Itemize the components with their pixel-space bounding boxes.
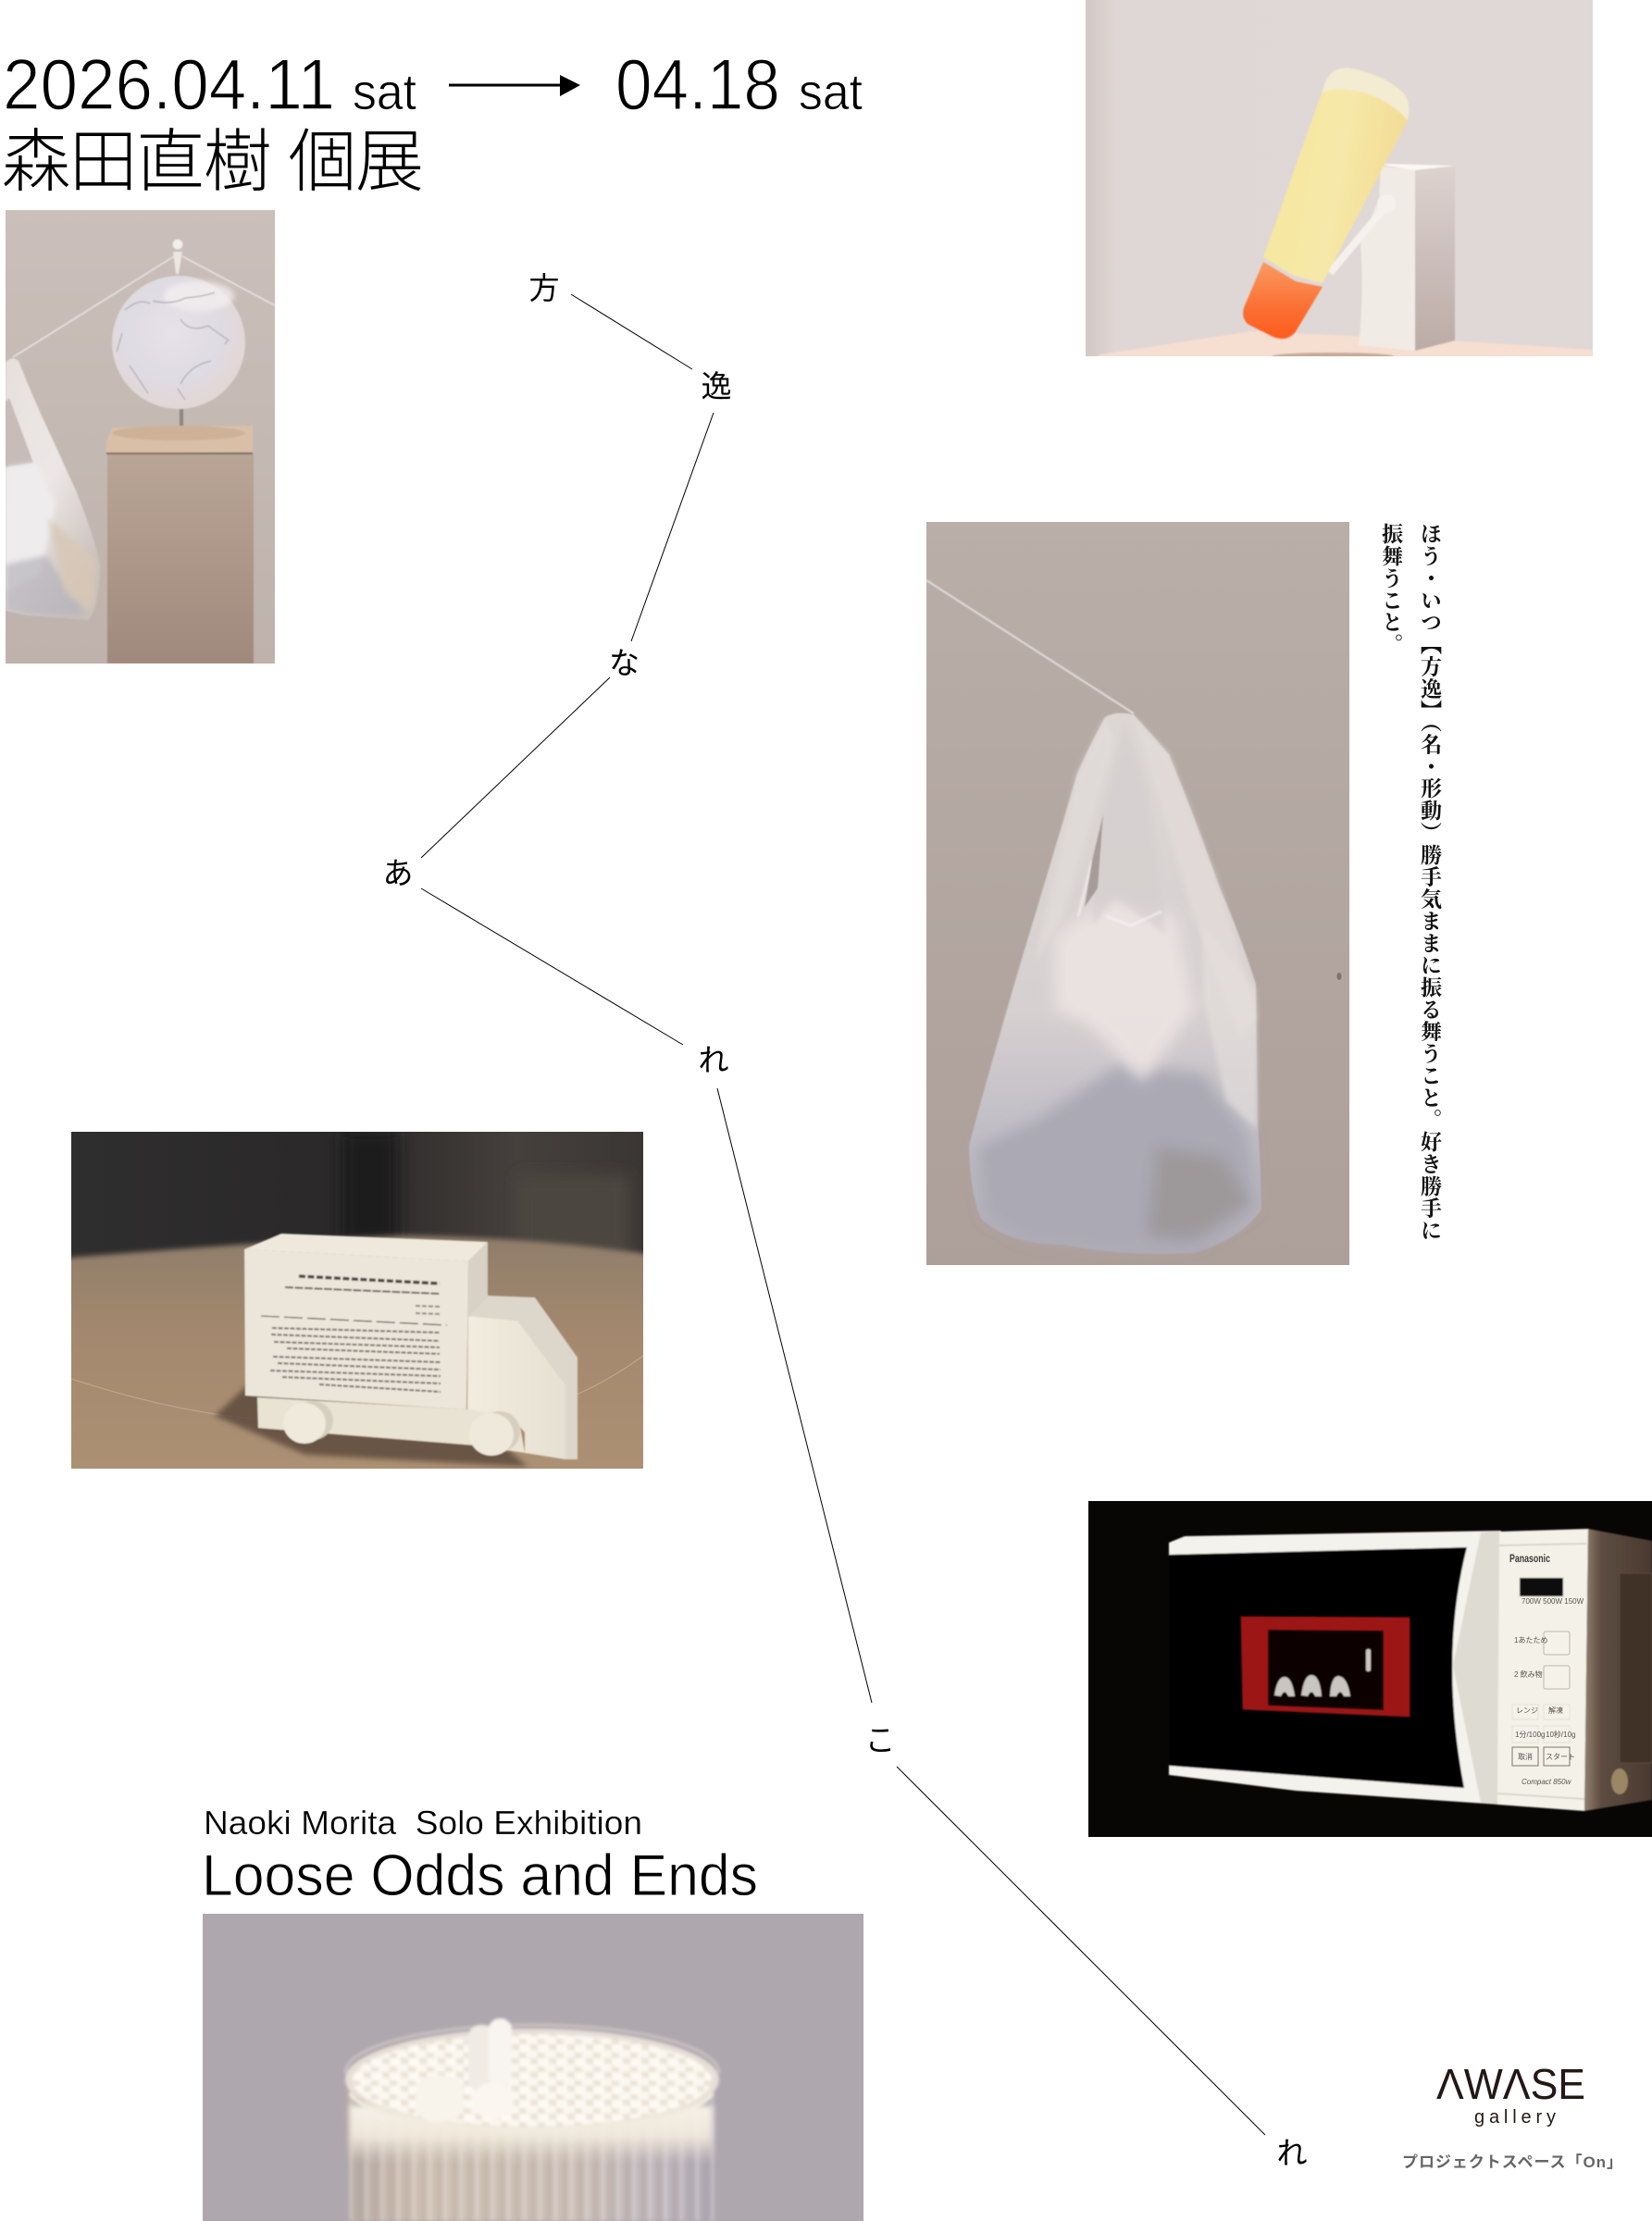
vertical guide path with hiragana: 方逸なあれこれ	[383, 271, 1307, 2170]
panel labels: 10秒/10g	[1546, 1730, 1575, 1739]
stand pin	[180, 409, 183, 433]
bottle body	[1263, 68, 1410, 283]
door window	[1169, 1547, 1467, 1788]
truck box	[244, 1234, 488, 1409]
string	[926, 580, 1134, 713]
bag body	[969, 713, 1261, 1254]
text block: dictionary definition in vertical type: ほう・いつ【方逸】（名・形動）勝手気ままに振る舞うこと。好き勝手に	[1418, 523, 1441, 1241]
arrow: date range	[449, 75, 580, 96]
logo: AWASE gallery	[1402, 2060, 1622, 2171]
pedestal body	[107, 454, 254, 664]
photo: cup of cotton swabs	[203, 1914, 863, 2221]
oven side	[1584, 1529, 1652, 1811]
connecting lines	[421, 294, 1265, 2135]
table surface	[71, 1232, 643, 1469]
subtitle: Naoki Morita Solo Exhibition: Naoki Morita Solo Exhibition	[204, 1804, 642, 1842]
rice ball icons	[1274, 1649, 1371, 1696]
panel labels: 2 飲み物	[1514, 1669, 1543, 1679]
truck chassis	[257, 1397, 525, 1453]
text block: definition second column: 振舞うこと。	[1379, 523, 1402, 655]
globe	[112, 276, 245, 409]
character れ: れ	[698, 1043, 729, 1077]
truck wheels	[283, 1401, 520, 1456]
panel labels: 解凍	[1548, 1706, 1563, 1715]
panel labels: 取消	[1518, 1752, 1533, 1761]
shadow under truck	[213, 1384, 528, 1469]
door shading	[1453, 1531, 1501, 1805]
title: artist name in Japanese: 森田直樹 個展	[2, 123, 424, 200]
panel labels: 1あたため	[1514, 1636, 1547, 1644]
pedestal top	[106, 426, 253, 453]
character あ: あ	[383, 856, 413, 890]
end date: 04.18	[615, 43, 780, 125]
oven door frame	[1169, 1531, 1501, 1805]
peg	[172, 239, 183, 274]
character れ (last): れ	[1277, 2136, 1307, 2170]
photo: orange-capped bottle on white holder	[1086, 0, 1593, 361]
panel labels: 1分/100g	[1515, 1731, 1545, 1739]
swab tips	[342, 2025, 722, 2133]
truck cab	[467, 1296, 578, 1459]
panel labels: Compact 850w	[1522, 1778, 1572, 1786]
plastic bag, left	[6, 358, 100, 620]
title: exhibition dates	[3, 43, 863, 125]
character 方: 方	[529, 271, 559, 305]
white holder	[1330, 164, 1455, 351]
end weekday: sat	[799, 63, 863, 120]
photo: globe on wooden pedestal with plastic bag	[6, 210, 275, 664]
panel labels: 700W 500W 150W	[1522, 1597, 1584, 1606]
bag folds	[1055, 898, 1194, 1083]
strings	[13, 256, 275, 357]
photo: white model truck with text label	[71, 1132, 643, 1469]
panel labels: スタート	[1546, 1753, 1575, 1761]
table	[1086, 331, 1593, 361]
panel labels: レンジ	[1516, 1706, 1538, 1715]
bottle cap	[1243, 262, 1323, 339]
title: Loose Odds and Ends: Loose Odds and Ends	[202, 1843, 758, 1908]
logo sub-word: gallery	[1474, 2107, 1556, 2128]
label text stripes	[261, 1276, 447, 1392]
panel buttons	[1512, 1632, 1570, 1766]
red display frame	[1241, 1617, 1410, 1717]
bag contents shadow	[977, 1062, 1252, 1222]
logo wordmark: ΛWΛSE	[1436, 2060, 1585, 2108]
wall mark	[1336, 973, 1342, 980]
raised swabs	[416, 2018, 514, 2122]
start date: 2026.04.11	[3, 43, 335, 125]
character な: な	[609, 646, 640, 680]
cup body	[342, 2018, 722, 2221]
panel brand: Panasonic	[1509, 1554, 1550, 1565]
panel labels	[1514, 1597, 1584, 1786]
photo: hanging plastic bag	[926, 522, 1349, 1265]
photo: microwave oven with red display	[1088, 1501, 1652, 1837]
control panel	[1497, 1529, 1588, 1811]
project space label: プロジェクトスペース「On」	[1402, 2153, 1622, 2171]
character 逸: 逸	[702, 369, 731, 403]
character こ: こ	[864, 1723, 896, 1757]
start weekday: sat	[353, 63, 416, 120]
